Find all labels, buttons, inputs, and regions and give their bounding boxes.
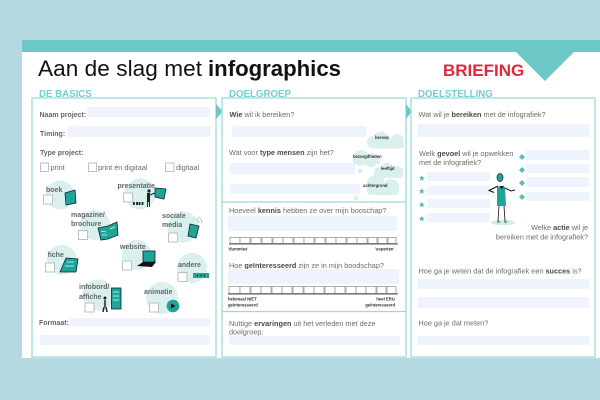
cloud: bezorgdheden: bezorgdheden	[353, 154, 382, 159]
panel: doelgroep	[222, 98, 406, 357]
question: geinteresseerd: Hoe geïnteresseerd zijn ze in mijn boodschap?	[229, 261, 384, 270]
format fields: Formaat:	[39, 320, 69, 327]
icon: infobord affiche: affiche	[79, 294, 102, 301]
icon: presenting person	[489, 174, 515, 225]
question: actie: Welke actie wil je	[531, 223, 588, 232]
icon: magazine brochure: brochure	[71, 221, 101, 228]
title: Aan de slag met	[38, 56, 203, 81]
option: print: print	[50, 163, 65, 172]
icon: sociale media: sociale	[162, 213, 186, 220]
question: actie	[496, 223, 588, 242]
scale: kennis: 'experten'	[375, 246, 394, 252]
heading: doelgroep: DOELGROEP	[229, 89, 291, 100]
list: gevoel stars: ★	[418, 200, 426, 210]
cloud: achtergrond: achtergrond	[363, 183, 388, 188]
panel: doelstelling	[411, 98, 595, 357]
question: ervaringen: doelgroep:	[229, 328, 264, 336]
option: digitaal: digitaal	[176, 163, 200, 172]
list: gevoel stars: ★	[418, 173, 426, 183]
timing field: Timing:	[40, 131, 65, 138]
question: ervaringen	[229, 319, 400, 345]
arrow: basics to doelgroep	[216, 104, 223, 119]
question: type mensen	[229, 148, 360, 194]
icon: website	[119, 240, 156, 270]
option: digitaal	[166, 163, 200, 172]
icon: sociale media	[162, 212, 202, 242]
question: succes	[418, 266, 589, 308]
cloud: beroep: beroep	[375, 135, 389, 140]
list: gevoel stars: ★	[418, 214, 426, 224]
question: bereiken: Wat wil je bereiken met de infografiek?	[418, 110, 546, 119]
icon: animatie	[144, 282, 179, 314]
icon: website: website	[119, 244, 146, 251]
heading: doelstelling: DOELSTELLING	[418, 89, 493, 100]
question: geinteresseerd	[228, 261, 399, 284]
top banner	[22, 40, 600, 81]
question: kennis: Hoeveel kennis hebben ze over mijn booschap?	[229, 206, 386, 215]
briefing label: BRIEFING	[443, 61, 524, 80]
icon: magazine brochure: magazine/	[71, 212, 105, 219]
question: meten: Hoe ga je dat meten?	[418, 318, 488, 328]
question: wie	[230, 110, 366, 137]
scale: interesse: geïnteresseerd	[365, 302, 395, 308]
question: wie: Wie wil ik bereiken?	[230, 110, 294, 119]
question: gevoel: Welk gevoel wil je opwekken	[419, 149, 513, 158]
scale: interesse: heel ERG	[376, 296, 395, 302]
project name field	[40, 107, 210, 119]
format fields	[39, 318, 210, 345]
question: kennis	[228, 206, 397, 231]
scale: interesse: helemaal NIET	[228, 296, 257, 302]
list: actie bullets	[519, 150, 589, 201]
question: gevoel: met de infografiek?	[419, 158, 481, 167]
timing field	[40, 126, 211, 138]
scale: interesse	[228, 286, 398, 308]
scale: interesse: geïnteresseerd	[228, 302, 258, 308]
icon: andere: andere	[178, 262, 201, 269]
option: print en digitaal: print én digitaal	[98, 163, 148, 172]
question: meten	[418, 318, 589, 345]
panel: de basics	[32, 98, 216, 357]
worksheet background	[22, 40, 600, 358]
icon: infobord affiche	[79, 280, 121, 312]
question: actie: bereiken met de infografiek?	[496, 232, 588, 242]
question: bereiken	[418, 110, 589, 137]
icon: boek: boek	[46, 187, 62, 194]
scale: kennis: 'dummies'	[228, 246, 248, 252]
question: succes: Hoe ga je weten dat de infografiek een succes is?	[418, 266, 582, 276]
icon: presentatie	[118, 178, 166, 210]
project name field: Naam project:	[40, 112, 86, 119]
title	[38, 56, 341, 81]
scale: kennis	[228, 238, 398, 252]
type project label: Type project:	[40, 150, 83, 157]
heading: de basics: DE BASICS	[39, 89, 92, 100]
question: ervaringen: Nuttige ervaringen uit het verleden met deze	[229, 319, 375, 328]
icon: fiche	[46, 245, 78, 275]
title: infographics	[208, 56, 341, 81]
icon: sociale media: media	[162, 222, 182, 229]
list: gevoel stars: ★	[418, 186, 426, 196]
question: gevoel	[419, 149, 513, 167]
icon: animatie: animatie	[144, 289, 173, 296]
icon: infobord affiche: infobord/	[79, 284, 109, 291]
question: type mensen: Wat voor type mensen zijn het?	[229, 148, 334, 157]
list: gevoel stars	[418, 172, 490, 224]
option: print	[40, 163, 65, 172]
arrow: doelgroep to doelstelling	[406, 104, 412, 119]
icon: magazine brochure	[71, 210, 118, 240]
clouds: audience traits	[353, 132, 404, 200]
cloud: leeftijd: leeftijd	[381, 166, 395, 171]
icon: presentatie: presentatie	[118, 183, 155, 190]
icon: andere	[177, 253, 209, 283]
icon: boek	[44, 180, 76, 210]
icon: fiche: fiche	[48, 252, 64, 259]
